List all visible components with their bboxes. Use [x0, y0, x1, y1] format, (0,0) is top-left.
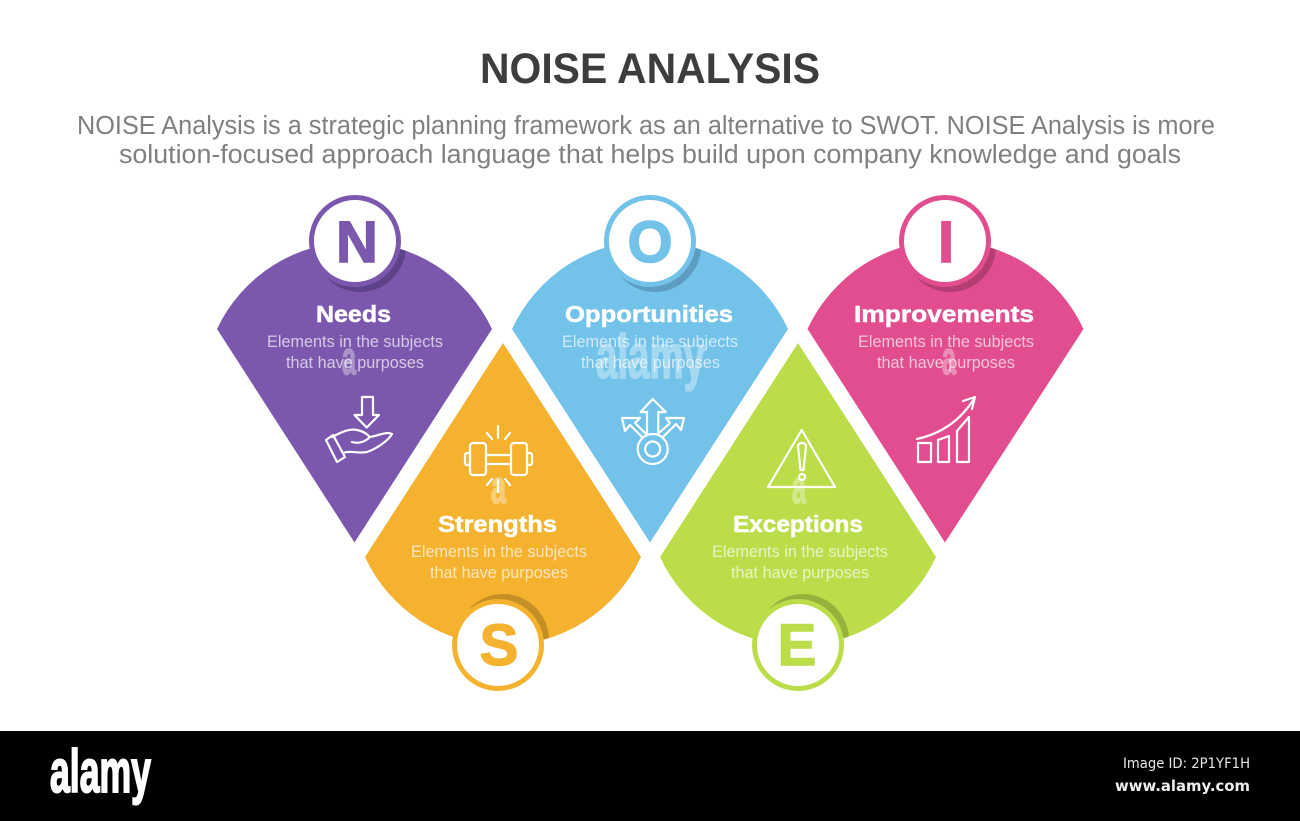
improvements letter badge [902, 198, 988, 284]
strengths letter badge: S [480, 613, 518, 678]
improvements description: that have purposes [877, 353, 1015, 372]
image id: Image ID: 2P1YF1H [1123, 756, 1250, 772]
exceptions description [712, 542, 888, 582]
watermarks: a [491, 461, 506, 513]
footer logo: alamy [50, 738, 151, 805]
strengths sector [365, 343, 641, 645]
strengths description [411, 542, 587, 582]
improvements heading: Improvements [854, 301, 1034, 327]
exceptions letter badge: E [778, 613, 816, 678]
strengths description: Elements in the subjects [411, 542, 587, 561]
improvements description [858, 332, 1034, 372]
needs sector [217, 242, 492, 542]
icon: rising bar chart [917, 397, 975, 462]
opportunities sector [512, 241, 788, 542]
needs circle shadow [326, 249, 406, 292]
needs description: Elements in the subjects [267, 332, 443, 351]
exceptions heading: Exceptions [733, 511, 863, 537]
improvements sector [808, 241, 1084, 542]
exceptions letter badge [754, 602, 842, 688]
strengths letter badge [454, 602, 542, 688]
needs heading: Needs [316, 301, 391, 327]
needs description: that have purposes [286, 353, 424, 372]
opportunities description: Elements in the subjects [562, 332, 738, 351]
opportunities letter badge [606, 198, 694, 284]
website: www.alamy.com [1115, 777, 1250, 795]
exceptions sector [660, 343, 936, 645]
exceptions description: that have purposes [731, 563, 869, 582]
exceptions description: Elements in the subjects [712, 542, 888, 561]
subtitle text: NOISE Analysis is a strategic planning framework as an alternative to SWOT. NOISE Analysis is more [77, 112, 1215, 140]
icon: warning triangle [768, 430, 835, 487]
opportunities circle shadow [620, 248, 701, 292]
panel: needs [217, 198, 492, 542]
opportunities letter badge: O [627, 210, 673, 275]
watermarks: alamy [596, 323, 705, 392]
watermarks: a [942, 332, 956, 384]
watermarks [342, 323, 956, 513]
subtitle text [77, 112, 1215, 169]
icon: dumbbell [465, 426, 532, 492]
needs letter badge: N [336, 210, 378, 275]
watermarks: a [342, 332, 356, 384]
needs description [267, 332, 443, 372]
opportunities description: that have purposes [581, 353, 720, 372]
title: NOISE ANALYSIS [480, 45, 820, 93]
panel: exceptions [660, 343, 936, 688]
watermarks: a [792, 461, 806, 513]
improvements letter badge: I [938, 210, 954, 275]
opportunities description [562, 332, 738, 372]
footer bar [0, 731, 1300, 821]
exceptions circle shadow [768, 594, 849, 638]
strengths description: that have purposes [430, 563, 568, 582]
improvements description: Elements in the subjects [858, 332, 1034, 351]
subtitle text: solution-focused approach language that helps build upon company knowledge and goals [119, 141, 1181, 169]
opportunities heading: Opportunities [565, 301, 733, 327]
improvements circle shadow [916, 248, 996, 292]
icon: branching arrows [622, 399, 684, 464]
panel: opportunities [512, 198, 788, 542]
panel: strengths [365, 343, 641, 688]
strengths heading: Strengths [438, 511, 557, 537]
panel: improvements [808, 198, 1084, 542]
strengths circle shadow [468, 594, 549, 640]
needs letter badge [312, 198, 398, 284]
icon: hand receiving arrow [326, 397, 392, 462]
